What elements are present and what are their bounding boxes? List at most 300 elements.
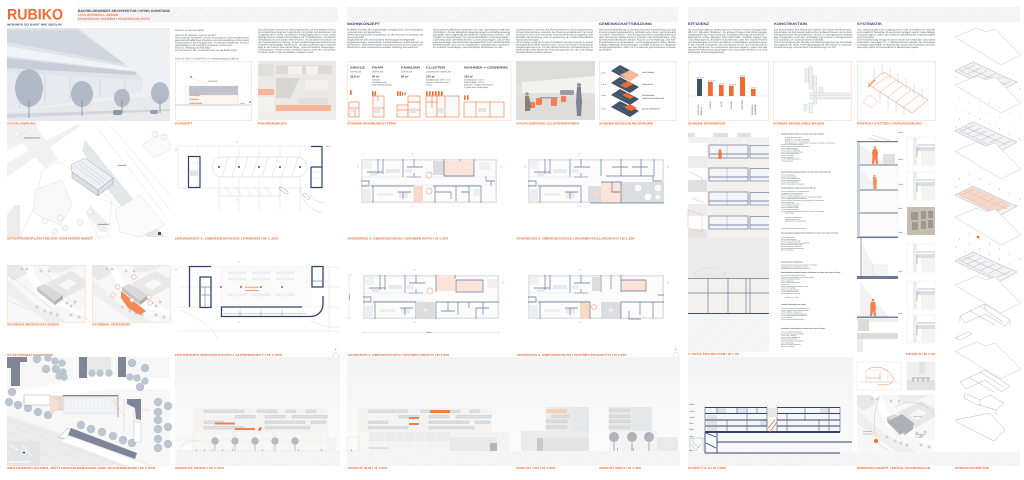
- urban tiles: [7, 357, 126, 386]
- building specs list: 15 mm Bodenbelag: [781, 236, 795, 239]
- building specs list: 20 mm Unterkonstruktion: [781, 290, 799, 293]
- poster: SCHNITT A-A I M 1:200: [688, 466, 726, 470]
- cluster: [426, 66, 452, 86]
- building text: entsteht nachhaltiger Wohnraum. Die Besonderheit des Entwurfs: [258, 44, 337, 46]
- community building text: und eben Lebensfüße - und die gemeinsame Freizeitgestaltung in: [599, 34, 677, 36]
- building specs list: 15 mm Fertigbodenoberfläche: [781, 330, 802, 334]
- community building text: geschaffen.: [599, 48, 612, 52]
- poster: GRUNDRISS ERDGESCHOSS I SUPERMARKT I M 1:200: [175, 353, 282, 357]
- building specs list: 130 mm Abgehängte Decke: [781, 158, 801, 161]
- live and work: 2 große Paar-Wohnungen: [464, 86, 489, 89]
- building specs list: Bekleidung der Aussenwände: [785, 220, 806, 223]
- facade 3 boards: [688, 133, 769, 352]
- efficiency text: Gemeinschaftsräume auszulagern für maximalen Komfort und eine: [688, 48, 768, 52]
- building specs list: 80 mm Holzwerkstoffplatte gedämmt: [781, 312, 807, 315]
- systematics text: Die Entwässerung erfolgt mit linear durch das Gebäude nach unten: [857, 38, 936, 42]
- detail drawings: [907, 137, 935, 343]
- community text: Wohnform, da sie alltägliche Begegnungen und Mitbenutzung: [433, 31, 511, 34]
- panel: meeting rooms schema: 4. OG: [601, 83, 606, 86]
- dimensions: 96,25 m: [426, 331, 432, 334]
- cluster text: Workshops das optimale Raumprogramm für die zukünftige: [516, 48, 594, 52]
- section detail: +9,20: [898, 207, 902, 210]
- live and work: Alternativ 4 Single-Wohnungen/: [464, 84, 494, 86]
- community text: [433, 28, 511, 49]
- intro text: gemeinschaftliches Wohnen in Kompaktbau mit einem: [175, 39, 249, 42]
- concept text: RUBIKO bietet ein vielseitiges Angebot für verschiedene: [347, 28, 424, 32]
- concept text: Insgesamt sind 60 verschiedene Wohnungen bereitgestellt:: [347, 38, 415, 42]
- building specs list: 120 mm Verglaste Wohnraum Bereich, Rahmen und Laibung: [781, 210, 824, 213]
- panel: bar chart living space: 14 m²: [751, 86, 757, 89]
- panel: bar chart living space: Ø PRO EW: [697, 104, 700, 115]
- mini map: [7, 441, 40, 466]
- building specs list: Bekiest, 0,6-1 cm 0,5 Sickerschicht: [785, 140, 810, 143]
- building specs list: 60 mm Dämmung: [781, 279, 794, 282]
- building specs list: Tragplatte mit Stützkonstruktion: [781, 192, 803, 195]
- building specs list: 30 mm Trittschalldämmung: [781, 336, 800, 339]
- live and work: [464, 66, 508, 89]
- section A-A: +12,45: [689, 416, 694, 419]
- panel: bar chart living space: WOHNEN +: [751, 103, 754, 115]
- building specs list: 2 mm Holzwerkstoffplatte: [781, 204, 799, 207]
- heading: KONSTRUKTION: [774, 22, 808, 26]
- section detail: +15,70: [898, 158, 903, 161]
- building specs list: 1 mm Dampfbremse Folie: [781, 203, 799, 206]
- labels: ROOFTOPBAR: [642, 71, 655, 74]
- cluster text: Als Prototyp zeigt der Entwurf RUBIKO wie das Dasein in einem: [516, 41, 593, 44]
- community building text: Zusammengehörigkeitsgefühl in Hofhallen unter ihnen, geht Höhenluft: [599, 31, 676, 34]
- cluster: CLUSTER: [426, 66, 446, 70]
- section detail: [857, 131, 903, 352]
- poster: DETAILS I M 1:20: [906, 352, 935, 356]
- panel: bar chart living space: 45 m²: [740, 74, 746, 77]
- panel: grid and columns: [858, 62, 936, 120]
- systematics text: [857, 28, 936, 49]
- efficiency text: auf das Minimum zu reduzieren und das eigene Leben auf die: [688, 46, 768, 49]
- poster: ANSICHT WEST I M 1:200: [599, 466, 641, 470]
- building specs list: 10 mm Installation: [781, 154, 794, 157]
- section detail: ±0,00: [898, 312, 902, 315]
- building specs list: 200 mm Abhangung Installation Zuluft: [781, 285, 808, 288]
- section A-A: +5,95: [689, 428, 693, 431]
- building text: Obergeschoss umfasst ein Parkdeck mit 24 Stellplätzen, raumlichen: [258, 36, 337, 39]
- panel: meeting rooms schema: 5. OG: [601, 72, 606, 74]
- building specs list: 800 mm Unterzug Stahlbeton: [781, 245, 802, 248]
- building text: sondern aktiv in die Architektur integriert wird.: [258, 51, 314, 54]
- section detail: +4,50: [898, 270, 902, 273]
- building specs list: 250 mm Mineralwolle-Dämmung: [781, 318, 804, 321]
- systematics text: ermöglicht flexible Raumnutzungen und zukünftige: [857, 31, 936, 34]
- poster: SITUATIONSPLAN I BLICK VON NORD-WEST: [7, 236, 93, 240]
- floor plan 1st floor parking: [176, 142, 331, 212]
- building specs list: Materialität und Geometrie der Stützen und Wände: [781, 264, 817, 266]
- cluster text: Nutzeranforderungen.: [516, 38, 540, 42]
- cluster text: Regelungen kann so mit den Bewohnerinnen und Bewohnern in: [516, 46, 594, 49]
- efficiency text: großzügige Wohnraumgestaltung.: [688, 51, 725, 54]
- community building text: Gemeinschaftsbildung ist die gemeinsame Entwicklung und das: [599, 28, 677, 32]
- couple: oder Wellenförderung: [372, 84, 393, 86]
- cluster: MAISONETTE WOHNUNG: [426, 70, 452, 74]
- building specs list: Geschossdeckenaufbau Wohnen von oben nach unten 380 mm:: [781, 170, 831, 174]
- intro text: Der Entwurf RUBIKO, ist ein Prototyp für innenstädtisches: [175, 36, 250, 40]
- building specs list: 1 mm Abdichtung: [781, 341, 793, 344]
- building specs list: 12 mm Gipskartonplatte: [781, 208, 798, 211]
- floor plan 5th floor: [525, 154, 668, 206]
- building specs list: 18 mm OSB Dampfbremse: [781, 149, 800, 152]
- panel: apartment types: [348, 62, 511, 120]
- family: WOHNUNG: [401, 70, 413, 74]
- live and work: 142 m²: [464, 75, 473, 79]
- systematics text: Supermarkt geführt und anschließend zur effektiven Netz gelenkt.: [857, 46, 919, 49]
- north arrow: N: [335, 348, 337, 351]
- building text: Arbeitsplätze, Arbeitsräume, Ansätze Freizeit, mehr nur vereinzelte,: [258, 48, 336, 52]
- efficiency text: Zukunftsprognose, flexiblere Wohnformen, was den Raum effizient: [688, 38, 767, 42]
- building specs list: 30 mm Trittschalldämmung: [781, 240, 800, 243]
- schema: concept: WOHNEN: [190, 94, 200, 97]
- panel: bar chart living space: CLUSTER: [741, 100, 744, 110]
- building specs list: 1 mm Abdichtung Bitumenbahn: [781, 150, 803, 153]
- single: 32,6 m²: [350, 75, 360, 79]
- panel: bar chart living space: 22,5 m²: [729, 83, 736, 86]
- poster: SCHEMA BEGEGNUNGSRÄUME: [599, 122, 653, 126]
- building specs list: 8 mm Aufdachschalung: [781, 147, 798, 150]
- energy site view: Geothermie: [915, 436, 923, 438]
- building specs list: Flachdachaufbau Wohnen ist oben nach unten 548 mm:: [781, 132, 825, 136]
- schema: concept: EINKAUFEN: [190, 102, 203, 105]
- building specs list: 80 mm Schüttung: [781, 249, 794, 252]
- building specs list: 80 mm Stahlbetondecke Recyclingbeton: [781, 241, 810, 244]
- labels: [642, 71, 665, 110]
- building specs list: 6 mm Stahlprofil: [781, 316, 793, 319]
- poster: SCHEMA MODULARES BAUEN: [773, 122, 824, 126]
- type plans: [349, 96, 504, 117]
- poster: 3 TAFEL PROJEKTION I M 1:50: [688, 352, 739, 356]
- north arrow: N: [675, 348, 677, 351]
- intro text: GRZ 0,8 I GFZ 2,8 I BGF 8721 m² I Nettowohnfläche 2630 m²: [175, 58, 239, 60]
- intro text: Supermarkt in der Hauptachse. Für Berlin schafft der Entwurf: [175, 42, 249, 44]
- panel: bar chart living space: [688, 62, 768, 120]
- building specs list: 400 mm Dämmung mineralisch: [781, 243, 803, 246]
- building specs list: 100 mm Sauberkeitsschicht: [781, 343, 801, 346]
- building specs list: Fassade Außen Stahlbeton:: [781, 260, 803, 264]
- building text: Das Gebäude vereint drei Nutzungsebenen auf kompaktem Raum:: [258, 28, 336, 32]
- systematics text: Leitungen gebündelt, in Hohlräumen durch das Parkdeck und den: [857, 44, 936, 46]
- construction text: ermöglicht die hohe Vorfertigungsquote effizienten Transport,: [774, 44, 852, 46]
- poster: VISUALISIERUNG CLUSTERWOHNEN: [516, 122, 579, 126]
- building specs list: 1 mm Folie, zweilagig: [781, 334, 796, 337]
- poster: ANSICHT SÜD I M 1:200: [348, 466, 387, 470]
- building specs list: Geschossdeckenaufbau Parken / Wohnen von oben nach unten 1770 mm:: [781, 232, 839, 234]
- visualisation: [7, 28, 170, 121]
- building specs list: 15 mm OSB-Platte: [781, 201, 794, 204]
- poster: GRUNDRISS 2. OBERGESCHOSS I WOHNEN KREATIV I M 1:200: [348, 353, 449, 357]
- energy site view: Wärmepumpe: [915, 433, 925, 436]
- heading: SYSTEMATIK: [857, 22, 883, 26]
- efficiency text: Singlewohnung, Paarwohnung, Familienwohnung und Wohnen +: [688, 34, 768, 36]
- building specs list: 20 mm Holzfaserdämmplatte bituminiert: [781, 145, 810, 148]
- building specs list: 16 mm Holzfaser, imprägniert: [781, 194, 802, 197]
- building specs list: 15 mm Holzfaser, imprägniert: [781, 311, 802, 314]
- building specs list: 180 mm Holz-Balkenschichtung: [781, 143, 804, 146]
- efficiency text: 39,5 m² (Quelle: Statista). Im Entwurf liegen die Wohnungen: [688, 31, 768, 34]
- authors: LISA WYRWOLL 285068: [78, 13, 118, 17]
- building specs list: Fassade Wohnen außen nach innen 500 mm:: [781, 186, 816, 190]
- community building text: Parkplätzen im Parkdeck - und Supermarkt. Eine aktive: [599, 41, 677, 44]
- poster: SPRENGISOMETRIE: [955, 466, 989, 470]
- intro text: Effizient, Vielseitig und lebendig –: [175, 46, 212, 50]
- building specs list: Oberfläche mit Lasur: [785, 218, 800, 221]
- building specs list: 140 mm Brettstapeldecke: [781, 181, 799, 184]
- community text: Lebensqualität und Bedürfnisse zu berücksichtigen. Sie fördert: [433, 38, 510, 42]
- schema reference axes: [7, 265, 90, 322]
- community text: Gemeinschaftliches Wohnen ist eine gemeinschaftliche: [433, 28, 511, 32]
- poster: ANSICHT NORD I M 1:200: [175, 466, 224, 470]
- family: FAMILIEN: [401, 66, 420, 70]
- poster: SCHEMA VERKEHR: [92, 323, 131, 327]
- cluster text: flexible Gestaltung und Anpassung an unterschiedliche: [516, 36, 594, 39]
- couple: [372, 66, 393, 86]
- elevation east: [518, 357, 596, 466]
- building specs list: 30 mm Beschichtung Gussasphalt: [781, 274, 806, 277]
- building specs list: Deckenplatte Stahlbeton Recycling 30 cm: [781, 267, 811, 270]
- couple: Kombiwohnung: [372, 81, 387, 84]
- figure icons: [350, 90, 469, 100]
- single: SINGLE: [350, 66, 365, 70]
- panel: bar chart living space: SINGLE: [709, 101, 712, 109]
- building specs list: 20 mm Stütze mit Verbund: [781, 292, 800, 295]
- live and work: Individualraum: 32 m²: [464, 78, 484, 82]
- floor plan 4th floor: [528, 270, 668, 322]
- building specs list: 16 mm Gipsfaserplatte Dampfbremse: [781, 197, 808, 200]
- building specs list: 15 mm Tragplatte mit Stützkonstruktion: [781, 309, 809, 312]
- live and work: Gemeinfläche: 110 m²: [464, 81, 485, 84]
- building specs list: 200 mm Schüttung: [781, 345, 794, 348]
- title: WOHNEN SO BUNT WIE BERLIN: [7, 22, 62, 26]
- labels: FITNESSRAUM: [642, 94, 655, 97]
- building specs list: 250 mm Bodenplatte Stahlbeton: [781, 340, 804, 342]
- community building text: Mitgestaltung, Kreuzwege, schafft Gänse zu Begeg-: [599, 44, 676, 46]
- community building text: [599, 28, 677, 52]
- hatched header bands: [77, 7, 1020, 22]
- schema: concept: [175, 62, 252, 120]
- efficiency text: Die durchschnittliche Wohnraum pro Person in Berlin beträgt etwa: [688, 28, 768, 32]
- concept text: [347, 28, 424, 49]
- intro text: Wohnen so bunt wie Berlin!: [175, 29, 205, 32]
- building text: den Supermarkt per Aufzug. In den darüberliegenden Geschossen: [258, 41, 337, 44]
- floor 4: [611, 77, 639, 93]
- situation plan: [7, 125, 170, 240]
- building specs list: 12 mm Gipsfaserplatte Dampfbremse: [781, 314, 808, 317]
- poster: GRUNDRISS 1. OBERGESCHOSS I PARKEN I M 1:200: [175, 236, 278, 240]
- efficiency text: und bedarfsgerecht nutzt und dabei nachhaltigere Wohnlösungen: [688, 41, 768, 44]
- intro text: ein Zuhause für alle, so facettenreich wie die Stadt selbst.: [175, 49, 238, 52]
- dimensions: [347, 275, 499, 334]
- north arrow: [333, 348, 339, 358]
- poster: GRUNDRISS 5. OBERGESCHOSS I WOHNEN KOLLABORATIV I M 1:200: [516, 236, 635, 240]
- elevation west: [596, 357, 680, 466]
- floor 5: [611, 65, 639, 81]
- poster: GRUNDRISS 3. OBERGESCHOSS I WOHNEN AKTIV I M 1:200: [348, 236, 448, 240]
- building specs list: 240 mm Zellulose Dämmung im Holzständer mit Deckleisten: [781, 199, 824, 202]
- poster: ENERGIEKONZEPT I DETAIL SICKERMULDE: [857, 466, 930, 470]
- community text: So entsteht nachhaltiger, zukunftsfähiger Wohnraum für alle.: [433, 46, 503, 49]
- building specs list: 30 mm Hinterlüftete Fassadenelemente: [781, 307, 809, 310]
- floor plan 1st floor parking: WEST: [326, 145, 331, 148]
- building specs list: 30 mm Deckenverkleidung: [781, 281, 800, 284]
- section A-A: +4,50: [689, 435, 693, 438]
- drainage detail: [907, 362, 935, 390]
- building specs list: 16 mm Installationsebene: [781, 206, 799, 209]
- floor plan 2nd floor: [363, 270, 503, 322]
- building specs list: 20 mm Abdichtung Bitumenbahn: [781, 247, 804, 250]
- couple: 50 m²: [372, 75, 380, 79]
- schema: concept: ENERGIE: [208, 80, 218, 83]
- community text: Wohnkonzepte, die sich an wandelnde Lebensphasen anpassen.: [433, 44, 510, 46]
- intro text: „Was ist der Mensch, wenn er wohnt?“: [175, 34, 217, 37]
- section detail: +18,70: [898, 131, 903, 134]
- floor 3: [611, 89, 639, 105]
- concept text: Wohnen und Gewerbeeinheit flächig bereichert.: [347, 46, 419, 49]
- floor 2: [611, 101, 639, 117]
- cluster visualisation: [516, 61, 595, 120]
- panel: meeting rooms schema: [600, 62, 676, 120]
- elevation north: [175, 357, 340, 466]
- systematics text: Anpassungen, ohne die statisch-tektonische Funktionalität: [857, 34, 935, 36]
- building specs list: 60 mm Zementestrich: [781, 175, 797, 178]
- room impression image: [258, 61, 336, 120]
- building specs list: 8 mm Gipskarton: [781, 159, 793, 162]
- cluster: 270 m²: [426, 75, 435, 79]
- community text: gestaltet und langfristig bezahlbare Wohnraum sichern. Die: [433, 34, 511, 36]
- community text: eine lebendige, durchmischte Gemeinschaft und schafft flexible: [433, 41, 511, 44]
- exploded axonometric: [955, 28, 1021, 441]
- cluster text: Nachbarschaft erarbeitet werden.: [516, 51, 552, 54]
- building text: Abstellplätzen und Sitzen ohne Parken; mit direktem Anschluss an: [258, 38, 337, 42]
- energy site view: Regenwasser: [863, 432, 873, 436]
- poster: GRUNDRISS 4. OBERGESCHOSS I WOHNEN PRODUKTIV I M 1:200: [516, 353, 627, 357]
- cluster text: minimiert wird. Die modulare Raumaufteilung ermöglicht eine: [516, 34, 594, 36]
- floor plan 3rd floor: [358, 154, 501, 206]
- construction text: Obergeschosses Recyclingbeton; ab dem 2. Obergeschoss besteht: [774, 34, 852, 36]
- caption: VISUALISIERUNG: [7, 122, 37, 126]
- building specs list: Anlagen mit Abhängung: [785, 216, 802, 219]
- poster: SCHEMA BEZUGSACHSEN: [7, 323, 59, 327]
- building specs list: 140 mm Brettstapeldecke: [781, 152, 799, 155]
- concept text: Singlewohnungen, Paarwohnen, Familienwohnen, Clusterwohnen als: [347, 41, 424, 44]
- labels: KREATIV WERKSTATT: [642, 108, 661, 110]
- building specs list: Fassade Supermarkt von außen:: [781, 303, 807, 306]
- building specs list: Fundament Sockelaufbau von oben nach unten 700 mm:: [781, 327, 825, 330]
- building text: liegt in der hohen Durchmischung: Unterschiedene Nutzungen -: [258, 46, 336, 49]
- energy site view: Photovoltaik: [913, 415, 922, 418]
- panel: modular building: [774, 62, 852, 120]
- schema: concept: PARKEN: [190, 98, 199, 101]
- concept text: Innerhalb begrenzter Kostenbox ist der Entwurf kurzzeitig und: [347, 34, 424, 36]
- building specs list: Dachbegrünung – Substratschicht, Drainage Schutzvlies, Wurzelschutz: [785, 141, 835, 144]
- cluster text: Infrastrukturnutzung, wodurch der Ressourcenverbrauch pro Kopf: [516, 31, 593, 34]
- cluster text: Wohngebäude lokale bleiben kann. Durch die klaren konstruktiven: [516, 44, 594, 46]
- family: 90 m²: [401, 75, 409, 79]
- panel: meeting rooms schema: 2. OG: [601, 108, 606, 110]
- poster: SCHEMA WOHNRAUM: [688, 122, 726, 126]
- building text: [258, 28, 337, 54]
- building specs list: 45 mm Zementestrich: [781, 238, 797, 241]
- panel: bar chart living space: FAMILIE: [730, 100, 733, 109]
- construction text: Konstruktiv ist das Hauptmaterial des Erdgeschosses und ersten: [774, 31, 853, 34]
- dimensions: 31,25 m: [348, 294, 351, 300]
- section A-A: +9,20: [689, 422, 693, 425]
- building specs list: Gitterrost aus Stahl: [785, 296, 799, 299]
- building specs list: Holz Fenster: [785, 212, 795, 215]
- systematics text: einzuschränken.: [857, 36, 875, 39]
- building specs list: 30 mm Trittschalldämmung: [781, 177, 800, 180]
- panel: bar chart living space: PAAR: [720, 101, 723, 107]
- building text: Im Erdgeschoss liegt der Supermarkt mit großen Schaufenstern und: [258, 31, 337, 34]
- schema: concept: GRÜN: [240, 102, 246, 105]
- building specs list: 35 mm Schüttung gebunden: [781, 179, 801, 182]
- cluster text: [516, 28, 594, 54]
- situation plan: HERMANNSTRASSE: [24, 136, 41, 140]
- building specs list: [781, 132, 841, 348]
- cluster text: Clusterwohnen optimiert die Flächeneffizienz durch gemeinsame: [516, 28, 594, 32]
- building text: Zugang über zwei räumliche Eingangszonen. Das erste: [258, 34, 337, 36]
- rails area: [7, 415, 155, 466]
- construction text: Durch die Planung der Wände und Geschossdecken als Einzelteile: [774, 41, 853, 44]
- poster: RAUMEINDRUCK: [258, 122, 288, 126]
- construction text: das Tragsystem aus Holz und bietet somit einen umfangreichen: [774, 36, 853, 39]
- building specs list: 100 mm Abhangdecke Installation: [781, 182, 805, 186]
- section A-A: +18,70: [689, 403, 694, 406]
- energy site view: Sickermulde: [863, 430, 872, 433]
- family: [401, 66, 420, 79]
- building specs list: 10 mm Putz: [781, 283, 790, 286]
- community building text: nungsmöglichkeiten. Mehr und so wird ein gemeinsames Zuhause: [599, 46, 677, 49]
- section A-A: [688, 357, 1020, 466]
- ground floor plan: SUPERMARKT: [245, 286, 260, 289]
- building specs list: Stahlbetonstützen Fertigteil 30 x 40 cm: [781, 265, 809, 268]
- panel: bar chart living space: 25 m²: [719, 82, 725, 85]
- building specs list: 80 mm EPS-Dämmung: [781, 338, 797, 341]
- trees: [8, 354, 149, 396]
- couple: PAAR: [372, 66, 384, 70]
- energy site view: [857, 395, 935, 452]
- north arrow: [673, 348, 679, 358]
- building specs list: Geschossdeckenaufbau Parkdeck Stahlbeton von oben nach unten 470 mm:: [781, 271, 841, 274]
- labels: TOBERAUM I WASCHCAFÉ: [642, 97, 665, 100]
- building specs list: Bekiest, 0,7-1,0 cm 0,5 Schüttung: [785, 138, 809, 141]
- building specs list: 80 mm Holzwerkstoffplatte gedämmt, Ziegel Sichtverbund: [781, 195, 822, 198]
- situation plan: BAHNHOF: [118, 164, 126, 167]
- caption: STÄDTEBAU SCHEMEN: [7, 353, 53, 357]
- systematics text: laufenden Leitungen. Im 1. Obergeschoss werden die einzelnen: [857, 41, 936, 44]
- concept text: Lebensformen und Bedürfnisse.: [347, 31, 382, 34]
- systematics text: Das Stützenraster der tragkörperten und verstellbaren Wände: [857, 28, 936, 32]
- panel: bar chart living space: 32,6 m²: [708, 79, 715, 82]
- building specs list: 15 mm Bodenbelag: [781, 174, 795, 176]
- schema traffic: [92, 265, 170, 322]
- efficiency text: in der Zukunft ermöglicht. Die Grundrisse ist so, der Individualraum: [688, 44, 767, 46]
- panel: bar chart living space: BERLIN: [700, 107, 703, 115]
- poster: KONZEPT: [175, 122, 193, 126]
- building specs list: 120 mm Installationsebene: [781, 278, 800, 281]
- single: [350, 66, 365, 79]
- live and work: WOHNEN + GEWERBE: [464, 66, 508, 70]
- energy diagram: [857, 362, 901, 390]
- intro text: [175, 29, 250, 60]
- concept text: Wohnform, ohne Maisonette Varianten sowie ein Konzept das: [347, 44, 424, 46]
- building specs list: 50 mm Fassadenelement: [781, 288, 800, 291]
- section detail: +12,45: [898, 183, 903, 186]
- construction text: Die Konstruktion des Gebäudes basiert auf einem Rindhi-Raster.: [774, 28, 852, 32]
